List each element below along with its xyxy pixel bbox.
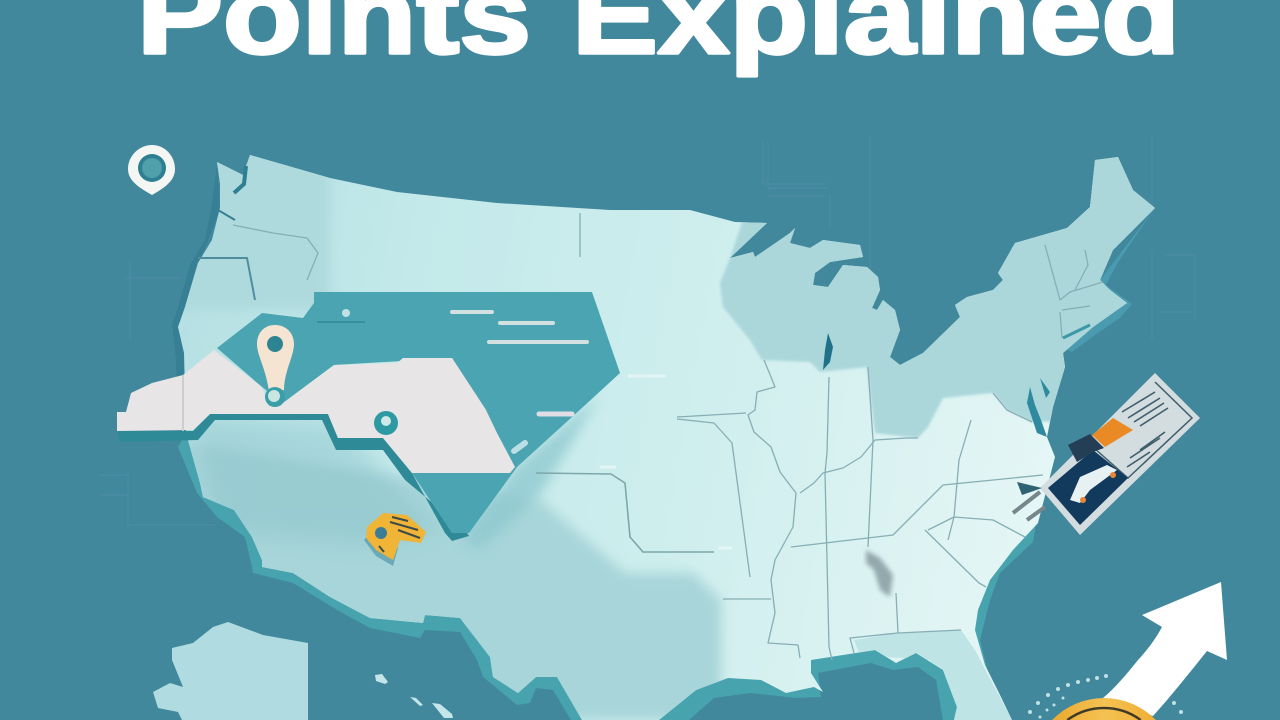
base land — [150, 140, 1180, 720]
icon: location pin on sheet — [257, 325, 294, 407]
icon: top-left location ring — [128, 145, 175, 195]
grey smudge — [866, 550, 893, 597]
sheet cast shade — [190, 420, 440, 545]
icon: ticket with car — [1013, 373, 1200, 535]
folded map sheet — [117, 292, 620, 541]
small dot and line — [317, 309, 365, 322]
fold line — [182, 375, 184, 431]
dotted arcs — [1028, 674, 1183, 718]
coastal band — [178, 400, 1040, 720]
Alaska — [153, 622, 453, 720]
car — [1070, 465, 1117, 503]
Long Island Sound — [1063, 325, 1090, 338]
coin inner ring — [1067, 708, 1141, 720]
teal panel — [217, 292, 620, 533]
teal panel fade — [462, 395, 600, 550]
arrow and coin — [1028, 582, 1227, 720]
text dashes — [452, 312, 587, 451]
icon: teal marker — [374, 411, 398, 435]
car panel — [1048, 450, 1128, 525]
white band — [117, 350, 515, 473]
orange photo — [1092, 418, 1133, 447]
land layers — [178, 155, 1155, 720]
state borders — [198, 210, 1103, 660]
Lake Michigan — [823, 333, 833, 370]
sheet shadow — [117, 414, 469, 541]
icon: yellow map badge — [364, 513, 426, 566]
north-west shade — [183, 155, 332, 312]
Florida shade — [854, 630, 1012, 720]
north and lake states — [720, 157, 1155, 439]
islands — [375, 674, 453, 718]
title — [137, 0, 1180, 77]
ticket card — [1040, 373, 1200, 535]
Puget Sound — [234, 166, 246, 193]
small white dashes — [600, 376, 732, 548]
text lines — [1122, 392, 1168, 467]
growth arrow — [1103, 582, 1227, 716]
north-east coast band — [1060, 208, 1155, 352]
ticket pens — [1013, 492, 1045, 520]
south-west shade — [170, 440, 721, 720]
gold coin — [1052, 698, 1156, 720]
west coast shade — [172, 165, 220, 440]
map of the United States — [172, 155, 1155, 720]
Chesapeake Bay — [1027, 378, 1050, 437]
